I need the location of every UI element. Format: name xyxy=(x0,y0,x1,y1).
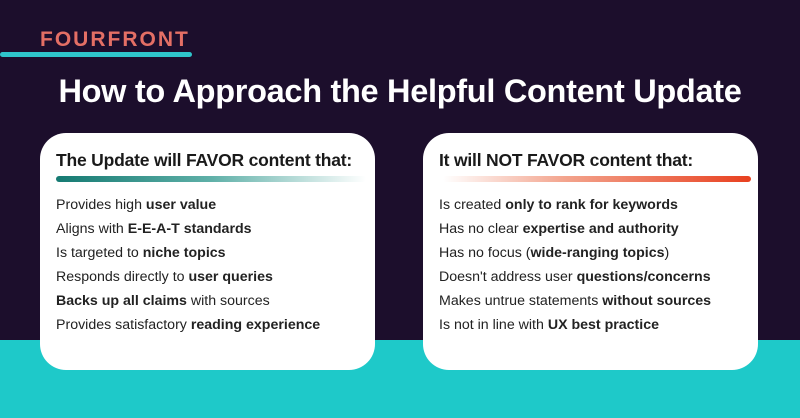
list: favor items: Provides high user value xyxy=(56,197,216,213)
list: favor items xyxy=(56,197,320,333)
title: How to Approach the Helpful Content Update xyxy=(58,73,742,109)
list: not favor items: Has no clear expertise and authority xyxy=(439,221,679,237)
list: favor items: Responds directly to user queries xyxy=(56,269,273,285)
list: favor items: Aligns with E-E-A-T standards xyxy=(56,221,252,237)
list: not favor items: Doesn't address user questions/concerns xyxy=(439,269,711,285)
logo: FOURFRONT xyxy=(40,28,190,51)
logo underline xyxy=(0,52,192,57)
heading: favor: The Update will FAVOR content that: xyxy=(56,150,352,170)
list: not favor items: Makes untrue statements without sources xyxy=(439,293,711,309)
list: favor items: Is targeted to niche topics xyxy=(56,245,226,261)
list: not favor items: Has no focus (wide-ranging topics) xyxy=(439,245,669,261)
heading: not favor: It will NOT FAVOR content that: xyxy=(439,150,693,170)
list: not favor items: Is created only to rank for keywords xyxy=(439,197,678,213)
list: not favor items xyxy=(439,197,711,333)
gradient bar: teal xyxy=(56,176,366,182)
list: favor items: Provides satisfactory reading experience xyxy=(56,317,320,333)
list: favor items: Backs up all claims with sources xyxy=(56,293,270,309)
panel: favor xyxy=(40,133,375,370)
list: not favor items: Is not in line with UX best practice xyxy=(439,317,659,333)
gradient bar: red xyxy=(443,176,751,182)
panel: not favor xyxy=(423,133,758,370)
teal bottom band xyxy=(0,340,800,418)
